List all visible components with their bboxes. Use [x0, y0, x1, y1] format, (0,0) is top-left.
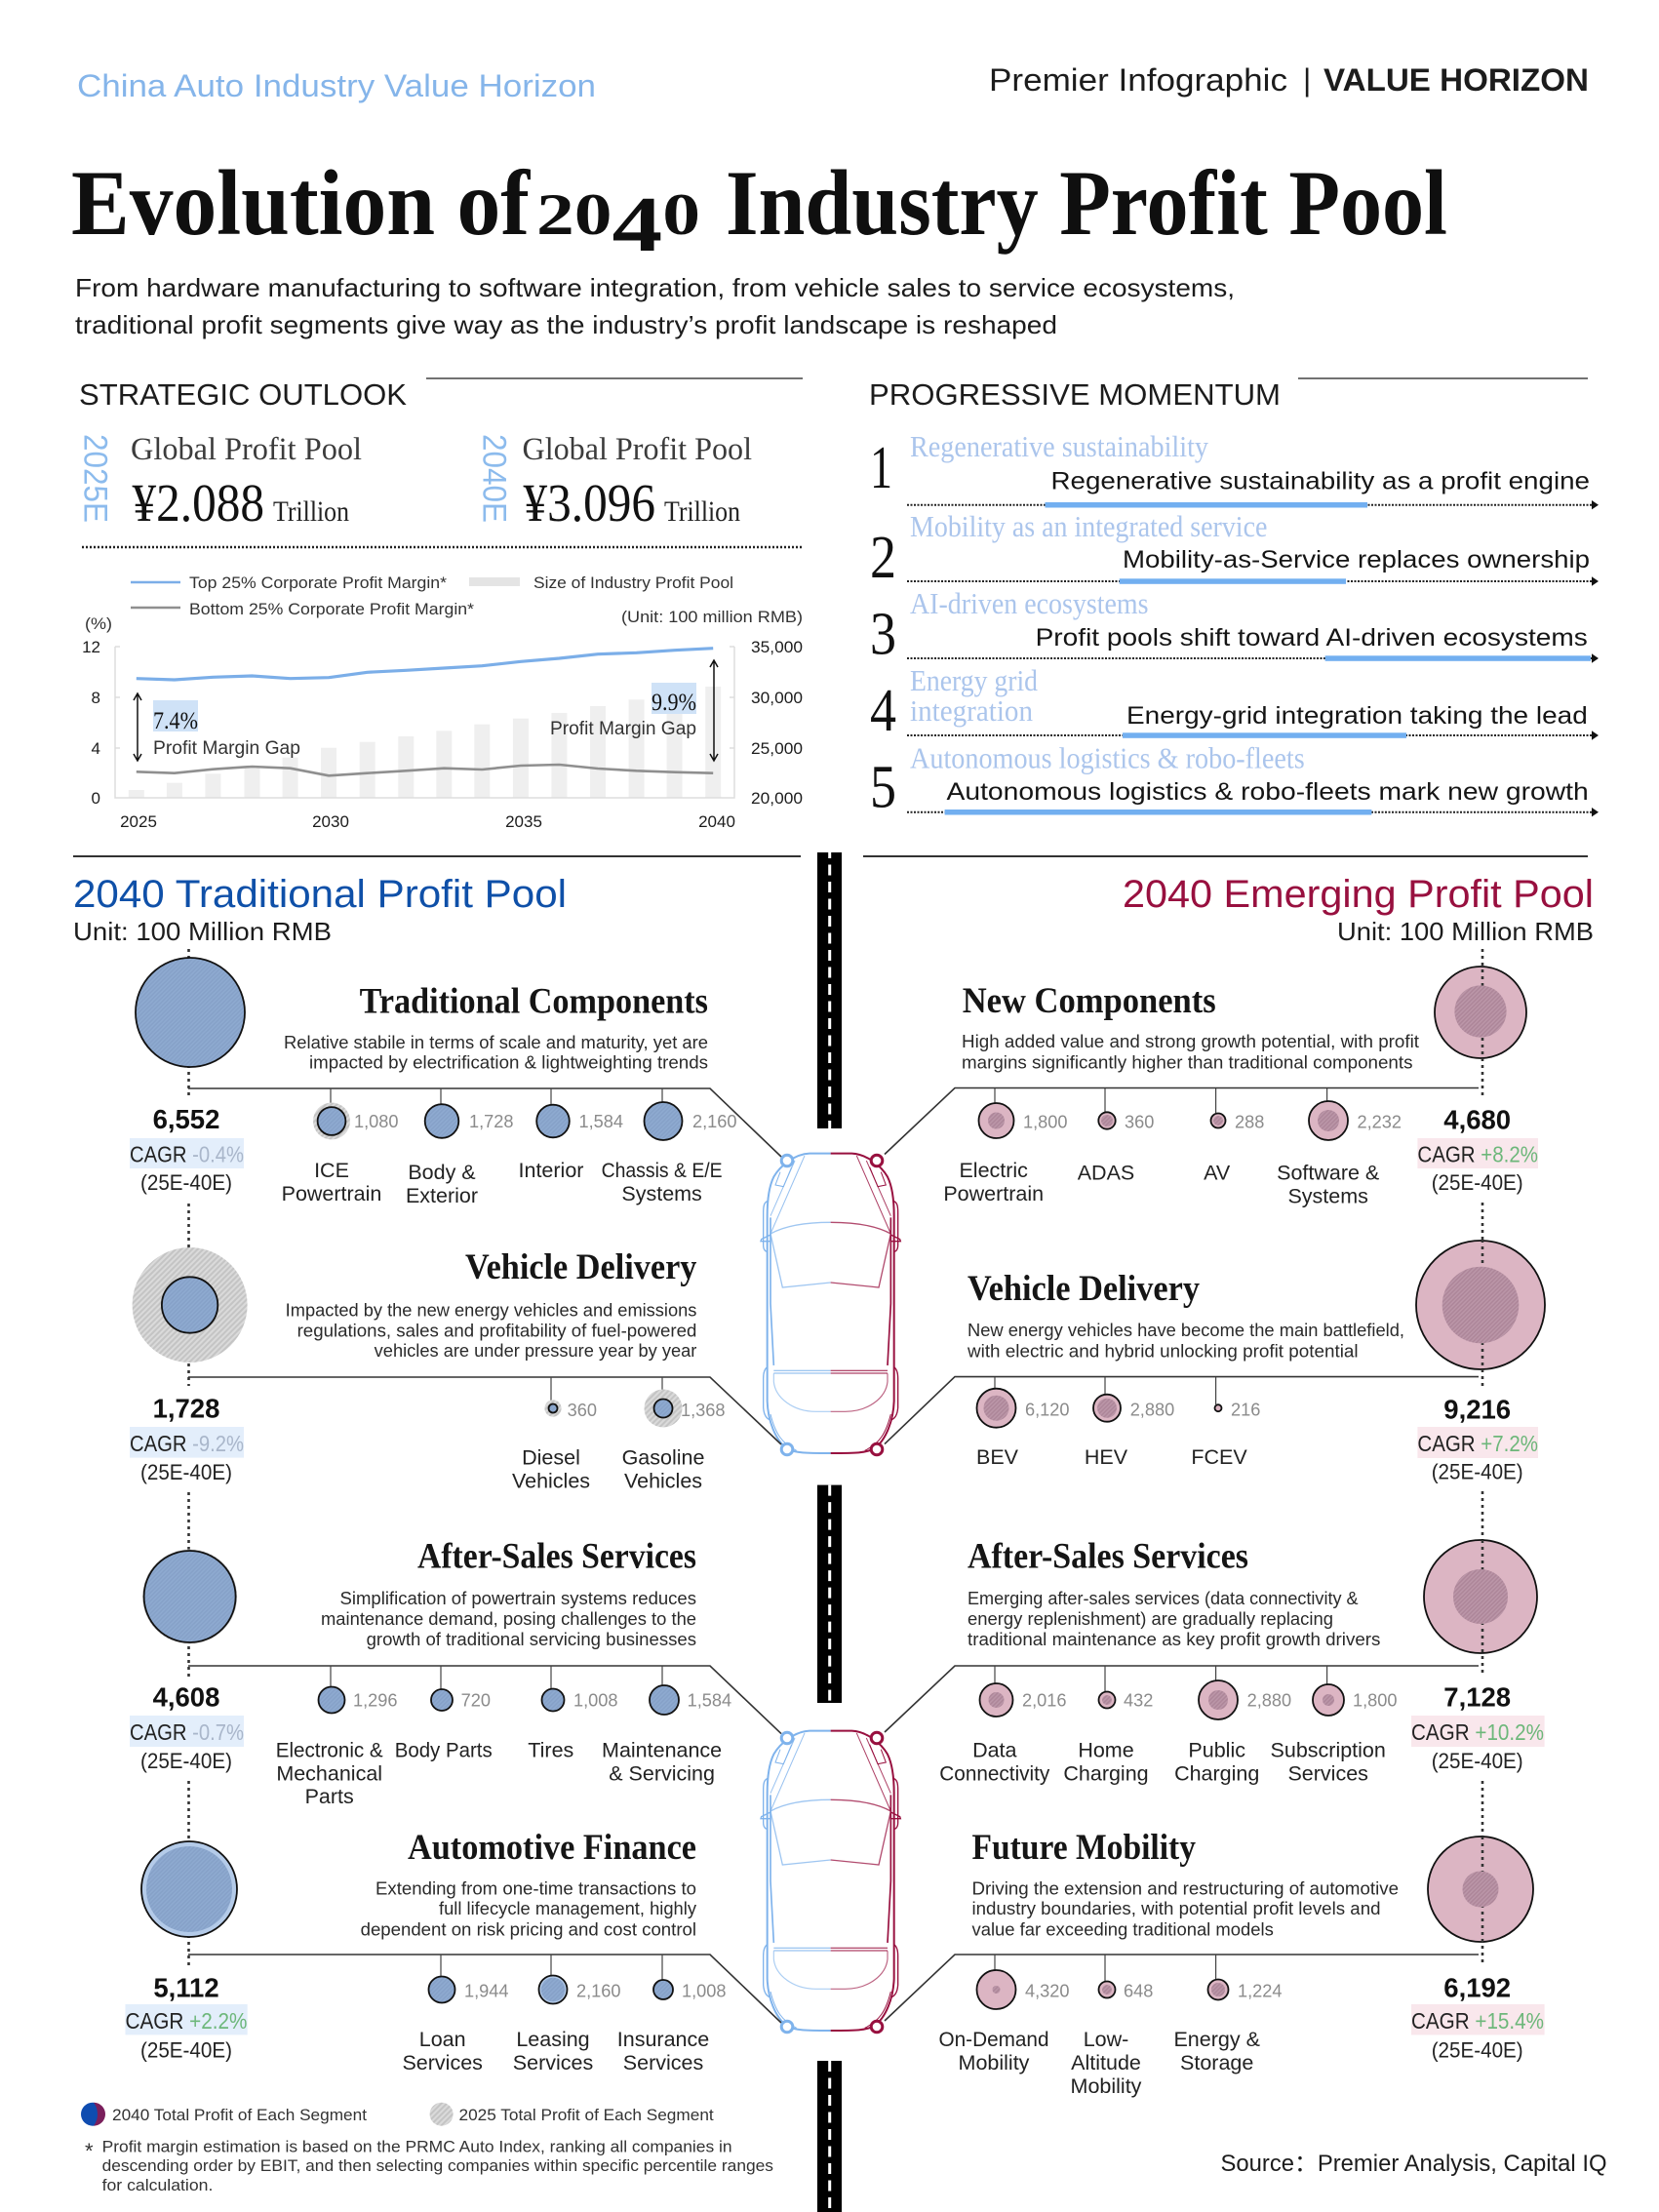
segment: BEV: 6,120 [1025, 1401, 1070, 1420]
segment: body and exterior: 1,728 [469, 1112, 514, 1131]
segment: loan services: Loan [419, 2028, 466, 2051]
total: 5,112 with CAGR [125, 1973, 248, 2062]
callout: 2040 margin gap 9.9%: Profit Margin Gap [550, 719, 696, 739]
description: energy replenishment) are gradually replacing [968, 1609, 1333, 1629]
heading: 2040 emerging profit pool [1123, 873, 1594, 946]
segment: home charging: Home [1078, 1738, 1134, 1761]
segment: energy and storage: 1,224 [1238, 1982, 1283, 2001]
description: value far exceeding traditional models [971, 1919, 1274, 1939]
total: 6,552 with CAGR: CAGR -0.4% [130, 1141, 244, 1166]
segment: chassis and E/E systems [602, 1088, 737, 1205]
total: 1,728 with CAGR: 1,728 [153, 1394, 219, 1424]
description: with electric and hybrid unlocking profit potential [967, 1342, 1359, 1362]
bubble: vehicle delivery total [133, 1247, 248, 1363]
road: centre divider [817, 848, 842, 2212]
segment: body and exterior: Exterior [406, 1184, 478, 1207]
segment: energy and storage: Storage [1180, 2051, 1253, 2074]
stat: 2040E global profit pool [476, 432, 752, 533]
bubble: automotive finance total [141, 1841, 237, 1937]
segment: leasing services: Services [513, 2051, 593, 2074]
bubble: after-sales total [1424, 1540, 1537, 1837]
segment: data connectivity: Connectivity [939, 1761, 1050, 1785]
segment: diesel vehicles: 360 [568, 1401, 597, 1420]
heading: new components: New Components [963, 981, 1216, 1021]
segment: home charging: Charging [1063, 1761, 1149, 1785]
callout: 2040 margin gap 9.9%: 9.9% [652, 690, 696, 716]
segment: interior [519, 1088, 623, 1182]
segment: insurance services [617, 1955, 727, 2074]
segment: diesel vehicles: Diesel [522, 1445, 580, 1469]
segment: tires: Tires [528, 1738, 573, 1761]
bubble: future mobility total [1428, 1837, 1533, 1966]
segment: ICE powertrain [282, 1088, 399, 1205]
segment: AV: AV [1204, 1162, 1231, 1185]
description [962, 1032, 1419, 1073]
panel: traditional components [130, 949, 781, 1247]
segment: electric powertrain [943, 1088, 1068, 1205]
item 3: AI-driven ecosystems: 3 [870, 602, 896, 668]
item 2: mobility as an integrated service: 2 [870, 525, 896, 591]
year axis labels: 2030 [312, 812, 349, 831]
segment: software and systems: Systems [1287, 1185, 1368, 1208]
description [971, 1878, 1399, 1939]
legend: 2025 Total Profit of Each Segment [458, 2106, 714, 2124]
stat: 2040E global profit pool: ¥3.096 [523, 473, 655, 533]
segment: low-altitude mobility: Altitude [1071, 2051, 1141, 2074]
item 3: AI-driven ecosystems [870, 586, 1599, 668]
heading: 2040 emerging profit pool: Unit: 100 Million RMB [1337, 917, 1594, 946]
chart legend: Bottom 25% Corporate Profit Margin* [189, 600, 474, 618]
title: Evolution of [71, 151, 531, 255]
segment: insurance services: 1,008 [682, 1982, 727, 2001]
total: 4,680 with CAGR: (25E-40E) [1432, 1170, 1523, 1195]
segment: ADAS: 360 [1125, 1113, 1154, 1132]
right axis labels: 20,000 [751, 789, 803, 808]
panel: vehicle delivery (emerging) [885, 1240, 1545, 1540]
footnote: descending order by EBIT, and then selecting companies within specific percentile ranges [102, 2157, 773, 2175]
segment: loan services: 1,944 [464, 1982, 509, 2001]
segment: FCEV: 216 [1231, 1401, 1260, 1420]
axis unit labels [85, 608, 803, 633]
panel: new components [885, 949, 1538, 1240]
total: 6,552 with CAGR: (25E-40E) [140, 1170, 232, 1195]
total: 5,112 with CAGR: 5,112 [153, 1973, 219, 2003]
segment: electronic and mechanical parts: 1,296 [353, 1691, 398, 1711]
stat: 2025E global profit pool: 2025E [76, 434, 113, 523]
description: High added value and strong growth potential, with profit [962, 1032, 1419, 1051]
total: 5,112 with CAGR: (25E-40E) [140, 2037, 232, 2062]
segment: home charging: 432 [1124, 1691, 1153, 1711]
segment: AV: 288 [1235, 1113, 1264, 1132]
heading: 2040 traditional profit pool: 2040 Traditional Profit Pool [73, 873, 567, 916]
total: 9,216 with CAGR: CAGR +7.2% [1417, 1431, 1538, 1456]
item 5: autonomous logistics and robo-fleets [870, 741, 1599, 821]
segment: on-demand mobility [938, 1955, 1070, 2074]
total: 7,128 with CAGR [1411, 1682, 1545, 1773]
chart legend: Size of Industry Profit Pool [533, 573, 733, 592]
year axis labels: 2035 [505, 812, 542, 831]
segment: energy and storage [1173, 1955, 1283, 2074]
stat: 2025E global profit pool: Global Profit Pool [131, 432, 362, 467]
description: margins significantly higher than traditional components [962, 1053, 1412, 1073]
heading: automotive finance: Automotive Finance [408, 1828, 696, 1868]
title: 20 [536, 182, 595, 247]
stat: 2025E global profit pool [76, 432, 362, 533]
line: top 25% margin [137, 649, 713, 680]
segment: energy and storage: Energy & [1173, 2028, 1260, 2051]
chart legend [131, 573, 733, 618]
right axis labels [751, 638, 803, 808]
total: 4,608 with CAGR: CAGR -0.7% [130, 1719, 244, 1745]
item 1: regenerative sustainability: Regenerative sustainability [910, 429, 1208, 463]
segment: body parts: 720 [461, 1691, 491, 1711]
segment: gasoline vehicles: 1,368 [681, 1401, 726, 1420]
chart legend: Top 25% Corporate Profit Margin* [189, 573, 447, 592]
legend [81, 2103, 714, 2126]
segment: maintenance and servicing: & Servicing [609, 1761, 715, 1785]
header brand: Premier Infographic | VALUE HORIZON: | [1303, 62, 1311, 98]
segment: HEV: 2,880 [1130, 1401, 1174, 1420]
callout: 2025 margin gap 7.4%: Profit Margin Gap [153, 738, 300, 759]
source: Source：Premier Analysis, Capital IQ [1221, 2151, 1607, 2177]
description [284, 1033, 708, 1073]
total: 9,216 with CAGR [1417, 1395, 1538, 1484]
item 1: regenerative sustainability [870, 429, 1599, 509]
item 4: energy grid integration: 4 [870, 678, 896, 744]
segment: data connectivity: Data [972, 1738, 1017, 1761]
header kicker: China Auto Industry Value Horizon: China Auto Industry Value Horizon [77, 68, 596, 103]
bubble: traditional components total [136, 958, 245, 1067]
total: 7,128 with CAGR: CAGR +10.2% [1411, 1719, 1544, 1745]
callout: 2025 margin gap 7.4%: 7.4% [153, 708, 198, 734]
heading: progressive momentum: PROGRESSIVE MOMENTUM [869, 377, 1281, 412]
year axis labels: 2040 [698, 812, 735, 831]
segment: HEV [1085, 1377, 1174, 1469]
heading: after-sales services: After-Sales Services [968, 1536, 1248, 1576]
segment: diesel vehicles [512, 1377, 597, 1493]
segment: on-demand mobility: Mobility [959, 2051, 1030, 2074]
total: 1,728 with CAGR: (25E-40E) [140, 1460, 232, 1484]
subtitle: From hardware manufacturing to software integration, from vehicle sales to service ecosystems, [75, 273, 1235, 302]
segment: leasing services: 2,160 [576, 1982, 621, 2001]
total: 4,608 with CAGR: (25E-40E) [140, 1749, 232, 1773]
bubble: new components total [1435, 949, 1526, 1240]
stat: 2025E global profit pool: Trillion [273, 495, 349, 528]
panel: progressive momentum [869, 377, 1599, 821]
segment: on-demand mobility: On-Demand [938, 2028, 1049, 2051]
segment: AV [1204, 1088, 1264, 1185]
segment: electronic and mechanical parts: Mechanical [276, 1761, 382, 1785]
segment: insurance services: Insurance [617, 2028, 709, 2051]
stat: 2040E global profit pool: Trillion [664, 495, 740, 528]
heading: 2040 traditional profit pool: Unit: 100 Million RMB [73, 917, 332, 946]
segment: gasoline vehicles [622, 1377, 726, 1493]
total: 4,608 with CAGR [130, 1682, 244, 1773]
segment: electronic and mechanical parts: Parts [305, 1785, 354, 1808]
item 4: energy grid integration: Energy-grid integration taking the lead [1126, 702, 1588, 730]
panel: automotive finance [125, 1828, 781, 2074]
stat: 2025E global profit pool: ¥2.088 [133, 473, 264, 533]
icon: car top view, upper [761, 1154, 900, 1453]
item 4: energy grid integration [870, 663, 1599, 744]
total: 4,680 with CAGR: CAGR +8.2% [1417, 1141, 1538, 1166]
right axis labels: 30,000 [751, 689, 803, 707]
description: Relative stabile in terms of scale and maturity, yet are [284, 1033, 708, 1052]
segment: public charging [1174, 1666, 1291, 1785]
total: 6,552 with CAGR: 6,552 [153, 1104, 219, 1134]
segment: HEV: HEV [1085, 1445, 1128, 1469]
subtitle: traditional profit segments give way as the industry’s profit landscape is reshaped [75, 310, 1057, 339]
heading: 2040 traditional profit pool [73, 873, 567, 946]
title: Industry Profit Pool [726, 151, 1447, 255]
item 5: autonomous logistics and robo-fleets: Autonomous logistics & robo-fleets [910, 741, 1305, 775]
segment: leasing services [513, 1955, 621, 2074]
description: Driving the extension and restructuring of automotive [971, 1878, 1399, 1898]
segment: gasoline vehicles: Gasoline [622, 1445, 704, 1469]
description: Impacted by the new energy vehicles and emissions [286, 1301, 696, 1321]
description: impacted by electrification & lightweighting trends [309, 1053, 708, 1073]
description: full lifecycle management, highly [439, 1899, 696, 1918]
segment: software and systems: 2,232 [1358, 1113, 1402, 1132]
segment: loan services [402, 1955, 509, 2074]
callout: 2025 margin gap 7.4% [134, 693, 300, 761]
segment: gasoline vehicles: Vehicles [624, 1470, 702, 1493]
description [321, 1589, 696, 1649]
total: 4,680 with CAGR [1417, 1104, 1538, 1195]
description: traditional maintenance as key profit growth drivers [968, 1630, 1380, 1649]
left axis labels: 12 [82, 638, 100, 656]
segment: maintenance and servicing: Maintenance [602, 1738, 722, 1761]
segment: body parts: Body Parts [395, 1738, 493, 1761]
axis unit labels: (Unit: 100 million RMB) [621, 608, 803, 626]
item 4: energy grid integration: Energy grid [910, 663, 1038, 697]
item 2: mobility as an integrated service: Mobility-as-Service replaces ownership [1123, 546, 1590, 573]
segment: low-altitude mobility: Low- [1084, 2028, 1128, 2051]
title: 0 [662, 182, 700, 247]
description: regulations, sales and profitability of fuel-powered [297, 1322, 696, 1341]
segment: interior: 1,584 [579, 1112, 623, 1131]
total: 9,216 with CAGR: (25E-40E) [1432, 1460, 1523, 1484]
segment: FCEV [1191, 1377, 1260, 1469]
panel: after-sales services (emerging) [885, 1536, 1545, 1837]
segment: subscription services: 1,800 [1353, 1691, 1398, 1711]
total: 7,128 with CAGR: 7,128 [1443, 1682, 1511, 1713]
segment: body and exterior: Body & [408, 1161, 476, 1184]
line: bottom 25% margin [137, 765, 713, 775]
segment: subscription services [1271, 1666, 1398, 1785]
total: 9,216 with CAGR: 9,216 [1443, 1395, 1511, 1425]
description [967, 1321, 1404, 1362]
segment: electric powertrain: 1,800 [1023, 1113, 1068, 1132]
total: 6,552 with CAGR [130, 1104, 244, 1195]
heading: vehicle delivery: Vehicle Delivery [465, 1247, 697, 1287]
total: 6,192 with CAGR: CAGR +15.4% [1411, 2008, 1544, 2034]
right axis labels: 35,000 [751, 638, 803, 656]
panel: strategic outlook [76, 377, 803, 831]
segment: on-demand mobility: 4,320 [1025, 1982, 1070, 2001]
segment: electric powertrain: Electric [959, 1159, 1028, 1182]
right axis labels: 25,000 [751, 739, 803, 758]
car connection wheels [781, 1155, 883, 2033]
heading: traditional components: Traditional Components [360, 981, 708, 1022]
segment: low-altitude mobility: 648 [1124, 1982, 1153, 2001]
segment: ICE powertrain: Powertrain [282, 1182, 381, 1205]
segment: home charging [1063, 1666, 1153, 1785]
item 5: autonomous logistics and robo-fleets: 5 [870, 755, 896, 821]
item 3: AI-driven ecosystems: AI-driven ecosystems [910, 586, 1149, 620]
description: industry boundaries, with potential profit levels and [971, 1899, 1381, 1918]
segment: chassis and E/E systems: Systems [621, 1182, 702, 1205]
total: 7,128 with CAGR: (25E-40E) [1432, 1749, 1523, 1773]
segment: ICE powertrain: ICE [314, 1159, 349, 1182]
left axis labels: 8 [92, 689, 100, 707]
description: dependent on risk pricing and cost control [361, 1919, 696, 1939]
header brand: Premier Infographic | VALUE HORIZON: VALUE HORIZON [1323, 62, 1589, 98]
segment: chassis and E/E systems: Chassis & E/E [602, 1159, 723, 1182]
year axis labels: 2025 [120, 812, 157, 831]
total: 6,192 with CAGR: 6,192 [1443, 1973, 1511, 2003]
segment: diesel vehicles: Vehicles [512, 1470, 590, 1493]
footnote: * [85, 2139, 94, 2163]
header brand: Premier Infographic | VALUE HORIZON [989, 62, 1589, 98]
segment: ICE powertrain: 1,080 [354, 1112, 399, 1131]
axis unit labels: (%) [85, 614, 112, 633]
segment: maintenance and servicing: 1,584 [688, 1691, 731, 1711]
description: Extending from one-time transactions to [375, 1878, 696, 1898]
item 1: regenerative sustainability: Regenerative sustainability as a profit engine [1051, 468, 1590, 495]
year axis labels [120, 812, 735, 831]
segment: electronic and mechanical parts [276, 1666, 398, 1808]
item 4: energy grid integration: integration [910, 693, 1033, 728]
segment: subscription services: Services [1287, 1761, 1368, 1785]
segment: BEV [976, 1377, 1070, 1469]
description [361, 1878, 696, 1939]
total: 5,112 with CAGR: CAGR +2.2% [125, 2008, 248, 2034]
chart: corporate profit margin and profit pool size [82, 573, 803, 831]
segment: electronic and mechanical parts: Electronic & [276, 1738, 383, 1761]
segment: interior: Interior [519, 1159, 583, 1182]
stat: 2040E global profit pool: 2040E [476, 434, 513, 523]
segment: electric powertrain: Powertrain [943, 1182, 1044, 1205]
segment: public charging: Charging [1174, 1761, 1259, 1785]
segment: software and systems [1277, 1088, 1402, 1208]
title: 4 [612, 182, 662, 268]
heading: vehicle delivery: Vehicle Delivery [968, 1269, 1200, 1309]
segment: insurance services: Services [623, 2051, 703, 2074]
segment: subscription services: Subscription [1271, 1738, 1386, 1761]
footnote [85, 2138, 773, 2194]
total: 6,192 with CAGR: (25E-40E) [1432, 2037, 1523, 2062]
total: 4,608 with CAGR: 4,608 [153, 1682, 219, 1713]
total: 1,728 with CAGR: CAGR -9.2% [130, 1431, 244, 1456]
panel: future mobility [885, 1828, 1545, 2098]
segment: software and systems: Software & [1277, 1162, 1379, 1185]
legend: 2040 Total Profit of Each Segment [112, 2106, 367, 2124]
segment: tires: 1,008 [573, 1691, 618, 1711]
segment: loan services: Services [402, 2051, 483, 2074]
panel: after-sales services (traditional) [130, 1536, 781, 1841]
left axis labels: 4 [92, 739, 100, 758]
title [71, 151, 1447, 268]
subtitle [75, 273, 1235, 339]
segment: low-altitude mobility: Mobility [1071, 2074, 1142, 2098]
total: 6,192 with CAGR [1411, 1973, 1545, 2062]
segment: body and exterior [406, 1088, 514, 1207]
footnote: for calculation. [102, 2177, 213, 2194]
segment: data connectivity [939, 1666, 1067, 1785]
description: vehicles are under pressure year by year [375, 1341, 696, 1361]
header brand: Premier Infographic | VALUE HORIZON: Premier Infographic [989, 62, 1287, 98]
left axis labels: 0 [92, 789, 100, 808]
total: 4,680 with CAGR: 4,680 [1443, 1104, 1511, 1135]
segment: data connectivity: 2,016 [1022, 1691, 1067, 1711]
description [968, 1589, 1380, 1649]
item 3: AI-driven ecosystems: Profit pools shift toward AI-driven ecosystems [1036, 624, 1588, 652]
segment: public charging: Public [1188, 1738, 1245, 1761]
segment: low-altitude mobility [1071, 1955, 1153, 2098]
bubble: after-sales total [142, 1549, 237, 1644]
panel: vehicle delivery (traditional) [130, 1247, 781, 1552]
segment: chassis and E/E systems: 2,160 [692, 1112, 737, 1131]
icon: car top view, lower [761, 1731, 900, 2031]
description [286, 1301, 696, 1361]
description: maintenance demand, posing challenges to the [321, 1609, 696, 1629]
segment: public charging: 2,880 [1247, 1691, 1291, 1711]
footnote: Profit margin estimation is based on the PRMC Auto Index, ranking all companies in [102, 2138, 732, 2155]
item 1: regenerative sustainability: 1 [870, 435, 892, 501]
stat: 2040E global profit pool: Global Profit Pool [523, 432, 752, 467]
segment: leasing services: Leasing [516, 2028, 590, 2051]
description: Simplification of powertrain systems reduces [339, 1589, 696, 1608]
segment: ADAS: ADAS [1078, 1162, 1134, 1185]
item 2: mobility as an integrated service [870, 509, 1599, 591]
segment: maintenance and servicing [602, 1666, 731, 1785]
segment: ADAS [1078, 1088, 1154, 1185]
heading: 2040 emerging profit pool: 2040 Emerging Profit Pool [1123, 873, 1594, 916]
total: 1,728 with CAGR [130, 1394, 244, 1484]
item 2: mobility as an integrated service: Mobility as an integrated service [910, 509, 1267, 543]
segment: body parts [395, 1666, 493, 1761]
segment: BEV: BEV [976, 1445, 1019, 1469]
description: New energy vehicles have become the main battlefield, [968, 1321, 1404, 1340]
description: growth of traditional servicing businesses [367, 1630, 696, 1649]
segment: FCEV: FCEV [1191, 1445, 1247, 1469]
bars: size of industry profit pool [129, 687, 721, 798]
heading: future mobility: Future Mobility [971, 1828, 1196, 1868]
heading: strategic outlook: STRATEGIC OUTLOOK [79, 377, 407, 412]
item 5: autonomous logistics and robo-fleets: Autonomous logistics & robo-fleets mark new growth [946, 778, 1589, 806]
bubble: vehicle delivery total [1416, 1240, 1545, 1540]
description: Emerging after-sales services (data connectivity & [968, 1589, 1359, 1608]
left axis labels [82, 638, 100, 808]
heading: after-sales services: After-Sales Services [417, 1536, 696, 1576]
segment: tires [528, 1666, 618, 1761]
callout: 2040 margin gap 9.9% [550, 660, 718, 761]
